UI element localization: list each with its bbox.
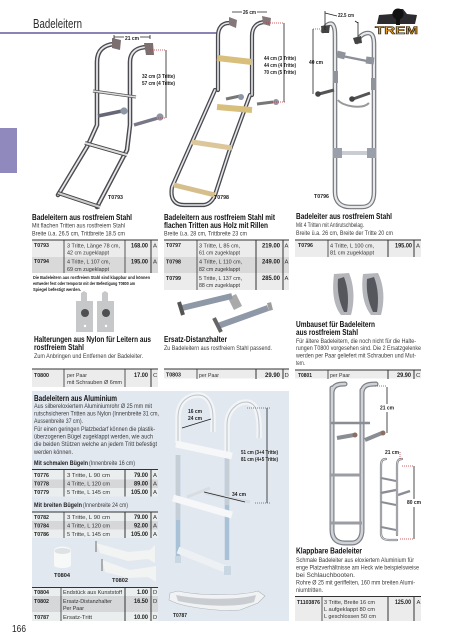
dimensions T0793 [108, 35, 175, 201]
table: wide hoops: A [153, 532, 157, 538]
subheading: wide hoops: Mit breiten Bügeln [34, 503, 82, 509]
table T0793/T0794: 195.00 [131, 258, 149, 266]
table T0796: T0796 [298, 243, 313, 249]
dimensions T0796: 40 cm [309, 60, 323, 66]
table: spare parts: 10.00 [134, 614, 149, 621]
column 1 heading: Badeleitern aus rostfreiem Stahl [32, 213, 132, 222]
table: wide hoops: T0786 [34, 532, 49, 538]
table T0800: T0800 [34, 373, 49, 379]
table T0796: 81 cm zugeklappt [330, 250, 374, 256]
table: narrow hoops: T0776 [34, 473, 49, 479]
column 1 heading: Breite ü.a. 26.5 cm, Trittbreite 18.5 cm [32, 230, 125, 238]
table T0800: 17.00 [134, 372, 149, 379]
subheading: narrow hoops [34, 460, 135, 467]
table: wide hoops: T0782 [34, 515, 49, 521]
section heading: Klappbare Badeleiter: Schmale Badeleiter aus eloxiertem Aluminium für [296, 557, 414, 564]
table T0801: T0801 [298, 373, 312, 379]
dimensions: aluminium ladder: 51 cm (3+4 Tritte) [241, 450, 278, 456]
table T1103876: 3 Tritte, Breite 16 cm [324, 600, 375, 606]
logo: TREM [375, 8, 418, 37]
table T0797-T0799: 219.00 [262, 242, 281, 250]
table T0797-T0799: A [284, 276, 288, 282]
icon: spare tread T0787: T0787 [173, 613, 187, 619]
table T1103876: A [416, 600, 420, 606]
dimensions T0798: T0798 [214, 195, 229, 201]
side tab [0, 128, 17, 173]
panel heading and description: Für einen geringen Platzbedarf können die plastik- [34, 426, 155, 433]
icon: replacement spacers [179, 296, 272, 332]
table: spare parts: D [153, 615, 157, 621]
section heading: Umbauset: rungen T0800 vorgesehen sind. Die 2 Ersatzgelenke [296, 345, 421, 352]
section heading: Umbauset: Umbauset für Badeleitern [296, 320, 375, 329]
dimensions T0793: 57 cm (4 Tritte) [142, 81, 175, 87]
panel heading and description [33, 394, 159, 456]
panel heading and description: Badeleitern aus Aluminium [34, 394, 117, 403]
section heading: Umbauset: Für ältere Badeleitern, die noch nicht für die Halte- [296, 338, 416, 345]
table: wide hoops: 79.00 [134, 514, 149, 521]
column 3 heading: Badeleiter aus rostfreiem Stahl [296, 212, 392, 221]
table T1103876: L geschlossen 50 cm [324, 614, 376, 620]
section heading: Klappbare Badeleiter: Klappbare Badeleiter [296, 546, 362, 556]
table T0793/T0794: 42 cm zugeklappt [67, 250, 109, 256]
ladder photo: folding ladder, large [331, 384, 386, 543]
ladder photo: folding ladder, small [381, 459, 410, 540]
table T0803: 29.90 [265, 372, 281, 379]
table T0797-T0799 [164, 240, 289, 290]
table T0797-T0799: 249.00 [262, 258, 281, 266]
dimensions: aluminium ladder [182, 408, 278, 503]
section heading: Klappbare Badeleiter: bei Schlauchbooten. [296, 572, 355, 579]
table: wide hoops: T0784 [34, 524, 49, 530]
table T0793/T0794: A [153, 244, 157, 250]
table: spare parts: Endstück aus Kunststoff [63, 590, 122, 596]
dimensions T0793: 21 cm [125, 36, 139, 42]
subheading: wide hoops [34, 502, 128, 509]
table T0801: per Paar [330, 373, 350, 379]
table T0803: T0803 [166, 372, 181, 378]
dimensions: aluminium ladder: 34 cm [232, 492, 246, 498]
table: spare parts [32, 588, 158, 621]
table: spare parts: T0787 [34, 615, 49, 621]
table: spare parts: Ersatz-Tritt [63, 615, 92, 621]
table T1103876: T1103876 [297, 600, 320, 606]
table: spare parts: D [153, 599, 157, 605]
column 3 heading: Mit 4 Tritten mit Antirutschbelag. [296, 222, 364, 229]
table: wide hoops: 3 Tritte, L 90 cm [67, 515, 110, 521]
table T0793/T0794: A [153, 260, 157, 266]
table T0796: 4 Tritte, L 100 cm, [330, 244, 374, 250]
table T0797-T0799: T0797 [166, 243, 181, 249]
dimensions T0796: T0796 [314, 194, 329, 200]
icon: spare tread T0787 [169, 591, 265, 619]
table: wide hoops [32, 512, 158, 538]
subheading: wide hoops: (Innenbreite 24 cm) [83, 502, 128, 509]
section heading: Klappbare Badeleiter: enge Platzverhältnisse am Heck wie beispielsweise [296, 564, 419, 572]
section heading: Ersatz-Distanzhalter [164, 335, 272, 352]
table T0793/T0794 [32, 240, 158, 273]
section heading: Klappbare Badeleiter: Rohre Ø 25 mit geriffelten, 160 mm breiten Alumi- [296, 580, 415, 586]
table: narrow hoops: T0778 [34, 482, 49, 488]
column 2 heading: Breite ü.a. 28 cm, Trittbreite 23 cm [164, 230, 247, 238]
table: spare parts: T0804 [34, 590, 49, 596]
dimensions: small folding ladder: 80 cm [407, 500, 421, 506]
table T0800 [32, 369, 158, 387]
dimensions T0796 [309, 11, 358, 200]
section heading: Ersatz-Distanzhalter: Ersatz-Distanzhalter [164, 335, 227, 344]
panel heading and description: Aussenbreite 37 cm). [34, 418, 83, 425]
section heading: Klappbare Badeleiter [296, 546, 419, 594]
table T0797-T0799: 88 cm zugeklappt [199, 283, 240, 289]
table: narrow hoops: A [153, 490, 157, 496]
subheading: narrow hoops: (Innenbreite 16 cm) [89, 460, 135, 467]
table T0793/T0794: 168.00 [131, 242, 149, 250]
table: spare parts: 16.50 [134, 598, 149, 605]
section heading: Ersatz-Distanzhalter: Zu Badeleitern aus rostfreiem Stahl passend. [164, 345, 272, 352]
panel heading and description: Aus silbereloxiertem Aluminiumrohr Ø 25 mm mit [34, 403, 152, 410]
table T0803: D [284, 373, 289, 379]
page number: 166 [12, 624, 26, 635]
table: spare parts: Per Paar [63, 606, 84, 612]
table: narrow hoops: A [153, 473, 157, 479]
table T0793/T0794: T0793 [34, 243, 49, 249]
dimensions T0798: 44 cm (3 Tritte) [264, 56, 296, 62]
note on fastening: entweder fest oder temporär mit der Befestigung T0800 am [33, 281, 135, 287]
icon: nylon brackets [76, 291, 114, 332]
icon: plastic end cap T0804 [54, 546, 71, 579]
table T0796 [295, 240, 421, 257]
table T0797-T0799: A [284, 244, 288, 250]
dimensions T0793: 32 cm (3 Tritte) [142, 74, 175, 80]
table T0797-T0799: 61 cm zugeklappt [199, 250, 240, 256]
table: narrow hoops [32, 470, 158, 496]
table: narrow hoops: A [153, 482, 157, 488]
column 1 heading: Mit flachen Tritten aus rostfreiem Stahl [32, 222, 125, 230]
dimensions T0796: 22.5 cm [338, 13, 354, 19]
title: Badeleitern [33, 16, 82, 31]
ladder photo T0793 [58, 38, 164, 207]
dimensions: aluminium ladder: 81 cm (4+5 Tritte) [241, 457, 278, 463]
logo: TREM: TREM [375, 25, 418, 37]
table T0793/T0794: T0794 [34, 259, 49, 265]
section heading: Halterungen: rostfreiem Stahl [34, 343, 84, 352]
table: narrow hoops: 89.00 [134, 480, 149, 488]
section heading: Halterungen: Halterungen aus Nylon für Leitern aus [34, 335, 151, 344]
table: wide hoops: A [153, 515, 157, 521]
table T0797-T0799: 285.00 [262, 275, 281, 282]
table T0793/T0794: 3 Tritte, Länge 78 cm, [67, 244, 120, 250]
table T0801: 29.90 [397, 372, 412, 379]
table T0797-T0799: 82 cm zugeklappt [199, 267, 240, 273]
column 1 heading [32, 213, 132, 238]
table T0800: mit Schrauben Ø 6mm [67, 380, 122, 386]
table: spare parts: D [153, 590, 157, 596]
table T0796: A [416, 244, 420, 250]
panel heading and description: rutschsicheren Tritten aus Nylon (Innenbreite 31 cm, [34, 410, 159, 418]
dimensions: large folding ladder: 21 cm [380, 406, 394, 412]
table T0797-T0799: A [284, 260, 288, 266]
table: wide hoops: A [153, 524, 157, 530]
icon: spacers T0802 [96, 541, 156, 584]
table: spare parts: Ersatz-Distanzhalter [63, 599, 112, 605]
table: wide hoops: 105.00 [131, 531, 149, 538]
table T0797-T0799: T0798 [166, 260, 181, 266]
table: narrow hoops: 79.00 [134, 472, 149, 479]
table T0797-T0799: 3 Tritte, L 85 cm, [199, 244, 240, 250]
table T1103876: L aufgeklappt 80 cm [324, 607, 375, 613]
section heading: Umbauset: tern. [296, 360, 305, 367]
table: spare parts: 1.00 [137, 589, 149, 596]
table: wide hoops: 4 Tritte, L 120 cm [67, 524, 110, 530]
column 3 heading: Breite ü.a. 26 cm, Breite der Tritte 20 cm [296, 230, 393, 237]
table T0800: per Paar [67, 373, 87, 379]
table T0797-T0799: 5 Tritte, L 137 cm, [199, 276, 242, 282]
column 2 heading [164, 213, 275, 238]
table T0800: C [153, 373, 158, 379]
table T1103876: 125.00 [395, 599, 412, 606]
table T1103876 [295, 596, 421, 621]
panel heading and description: werden können. [33, 449, 73, 456]
table: wide hoops: 92.00 [134, 522, 149, 530]
dimensions T0798: 70 cm (5 Tritte) [264, 70, 296, 76]
icon: plastic end cap T0804: T0804 [54, 573, 70, 579]
table T0796: 195.00 [395, 242, 413, 250]
table: narrow hoops: T0779 [34, 490, 49, 496]
dimensions: large folding ladder [375, 386, 394, 433]
table T0793/T0794: 4 Tritte, L 107 cm, [67, 260, 110, 266]
section heading: Umbauset: werden per Paar geliefert mit Schrauben und Mut- [295, 352, 416, 360]
dimensions T0798: 26 cm [243, 10, 256, 16]
ladder photo: aluminium [173, 395, 259, 575]
icon: retrofit hinges [333, 273, 383, 315]
table: wide hoops: 5 Tritte, L 145 cm [67, 532, 110, 538]
table: spare parts: T0802 [34, 599, 49, 605]
panel heading and description: die beiden Stützen welche an jedem Tritt befestigt [34, 441, 157, 448]
dimensions T0798: 44 cm (4 Tritte) [264, 63, 296, 69]
table: narrow hoops: 3 Tritte, L 90 cm [67, 473, 110, 479]
table: narrow hoops: 105.00 [131, 489, 149, 496]
icon: spacers T0802: T0802 [112, 578, 128, 584]
panel heading and description: überzogenen Bügel zugeklappt werden, wie auch [34, 434, 153, 440]
section heading: Halterungen: Zum Anbringen und Entfernen der Badeleiter. [34, 353, 143, 360]
note on fastening [33, 275, 150, 293]
column 2 heading: flachen Tritten aus Holz mit Rillen [164, 221, 268, 230]
dimensions T0798 [214, 10, 296, 201]
table T0797-T0799: T0799 [166, 276, 181, 282]
column 2 heading: Badeleitern aus rostfreiem Stahl mit [164, 213, 275, 222]
note on fastening: Spiegel befestigt werden. [33, 287, 82, 293]
table: narrow hoops: 5 Tritte, L 145 cm [67, 490, 110, 496]
ladder photo T0798 [172, 16, 279, 205]
table T0793/T0794: 69 cm zugeklappt [67, 267, 109, 273]
ladder photo T0796 [315, 24, 376, 207]
table T0803: per Paar [199, 373, 219, 379]
table T0797-T0799: 4 Tritte, L 110 cm, [199, 260, 242, 266]
dimensions: small folding ladder [385, 450, 421, 539]
dimensions T0793: T0793 [108, 195, 123, 201]
dimensions: small folding ladder: 21 cm [385, 450, 399, 456]
dimensions: aluminium ladder: 24 cm [188, 416, 202, 422]
section heading: Halterungen [34, 335, 151, 360]
section heading: Klappbare Badeleiter: niumtritten. [296, 587, 323, 594]
table T0803 [164, 369, 289, 379]
column 3 heading [296, 212, 393, 237]
note on fastening: Die Badeleitern aus rostfreiem Stahl sind klappbar und können [33, 275, 150, 281]
subheading: narrow hoops: Mit schmalen Bügeln [34, 461, 88, 467]
table T0801 [295, 370, 421, 379]
table T0801: C [416, 373, 421, 379]
section heading: Umbauset: aus rostfreiem Stahl [296, 328, 358, 337]
panel: aluminium ladders [32, 391, 289, 621]
section heading: Umbauset [295, 320, 421, 367]
table: narrow hoops: 4 Tritte, L 120 cm [67, 482, 110, 488]
dimensions: aluminium ladder: 16 cm [188, 409, 202, 415]
